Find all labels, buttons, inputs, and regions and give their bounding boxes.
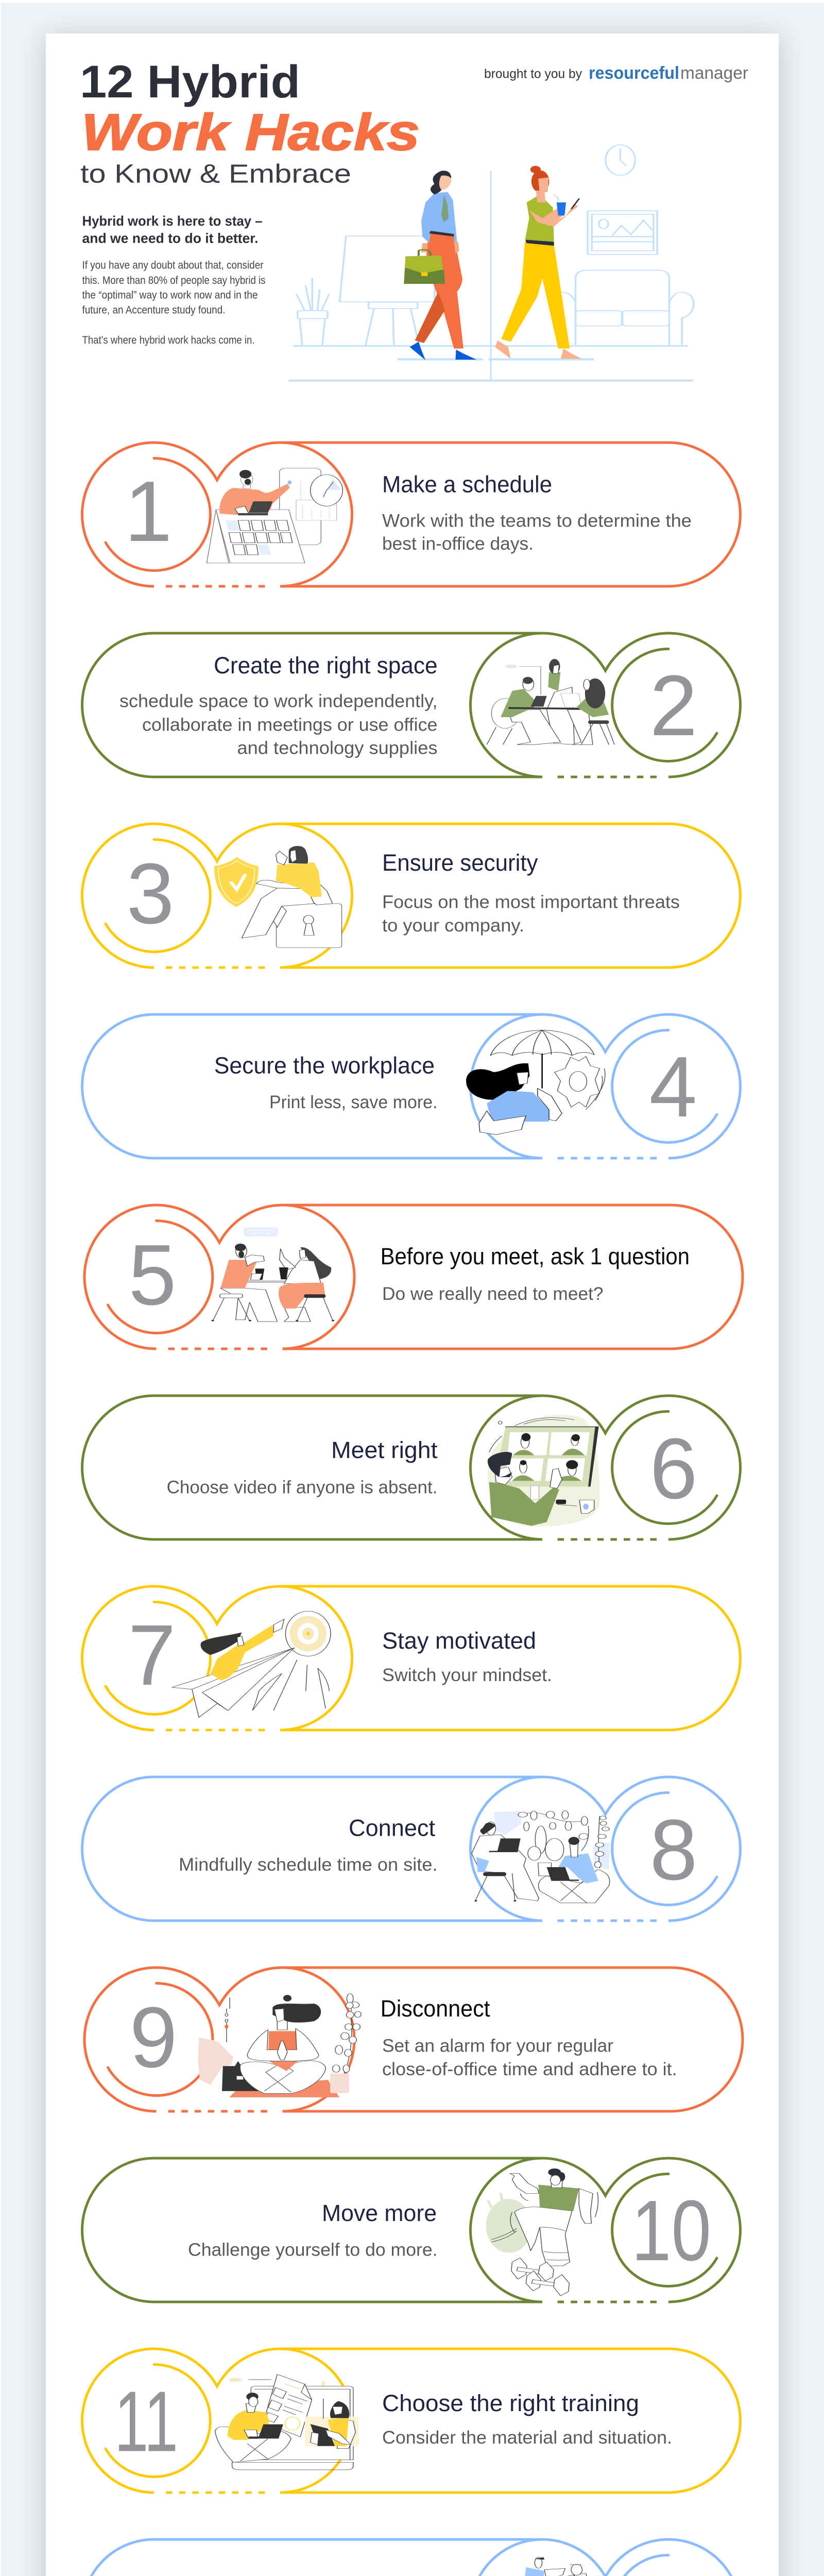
pill outline (82, 1777, 741, 1921)
number: 2 (650, 658, 697, 754)
heading: Stay motivated (382, 1628, 536, 1654)
number: 1 (125, 464, 172, 560)
header: brand line: manager (680, 63, 748, 83)
step 1 (82, 443, 741, 586)
body text: Focus on the most important threats (382, 892, 680, 912)
body text: Print less, save more. (269, 1092, 438, 1112)
body text: Switch your mindset. (382, 1665, 552, 1685)
body text: Challenge yourself to do more. (188, 2240, 438, 2260)
icon: shield and padlock (214, 846, 342, 948)
body text: Consider the material and situation. (382, 2428, 672, 2448)
icon: two people on laptops with plants (472, 1811, 610, 1903)
heading: Disconnect (381, 1995, 490, 2022)
heading: Secure the workplace (214, 1052, 435, 1079)
step 5 (84, 1205, 743, 1349)
pill outline (82, 824, 741, 968)
header: intro text: Hybrid work is here to stay – (82, 213, 263, 229)
pill outline (82, 633, 741, 777)
heading: Choose the right training (382, 2390, 639, 2416)
number: 11 (114, 2374, 178, 2470)
heading: Move more (322, 2200, 437, 2226)
header: intro text: and we need to do it better. (82, 230, 259, 246)
header: title: 12 Hybrid (80, 56, 300, 107)
step 4 (82, 1014, 741, 1158)
step 8 (82, 1777, 741, 1921)
icon: man at calendar (207, 468, 342, 563)
pill outline (82, 1014, 741, 1158)
number: 7 (128, 1607, 176, 1703)
number: 4 (649, 1039, 697, 1135)
pill outline (82, 1396, 741, 1539)
heading: Ensure security (382, 850, 538, 876)
pill outline (82, 2158, 741, 2302)
woman with coffee and phone (495, 166, 582, 359)
header: intro text: That’s where hybrid work hacks come in. (82, 334, 254, 346)
icon: woman with umbrella and gear (466, 1030, 605, 1134)
icon: paper plane and target (172, 1611, 331, 1717)
woman with briefcase (404, 171, 476, 360)
body text: to your company. (382, 916, 524, 936)
pill outline (84, 1968, 743, 2111)
heading: Create the right space (214, 652, 438, 679)
header: intro text (82, 213, 266, 346)
number: 3 (127, 846, 174, 942)
body text: best in-office days. (382, 534, 534, 554)
body text: Mindfully schedule time on site. (179, 1855, 438, 1875)
hero illustration: office room and two walking women (288, 145, 694, 381)
pill outline (82, 443, 741, 586)
header: intro text: If you have any doubt about that, consider (82, 259, 264, 271)
pill outline (84, 1205, 743, 1349)
heading: Meet right (331, 1437, 438, 1463)
header: brand line: resourceful (589, 63, 679, 83)
body text: Work with the teams to determine the (382, 511, 692, 531)
body text (119, 691, 438, 758)
number: 6 (650, 1421, 697, 1517)
header: intro text: future, an Accenture study found. (82, 304, 226, 316)
room line art (288, 145, 694, 381)
heading: Connect (349, 1815, 435, 1841)
icon: two people talking over coffee (211, 1227, 334, 1321)
icon: video call on screen (488, 1415, 599, 1527)
step 10 (82, 2158, 741, 2302)
header: title (80, 56, 420, 189)
header: intro text: this. More than 80% of people say hybrid is (82, 275, 266, 286)
pill outline (82, 2349, 741, 2493)
header: title: to Know & Embrace (80, 159, 351, 189)
number: 5 (129, 1227, 176, 1323)
icon: man exercising with ball and dumbbells (486, 2168, 598, 2296)
body text: close-of-office time and adhere to it. (382, 2059, 677, 2079)
icon: online training on laptop (215, 2375, 359, 2470)
step 9 (84, 1968, 743, 2111)
heading: Before you meet, ask 1 question (381, 1243, 690, 1269)
body text (382, 892, 680, 936)
icon: people gardening together (441, 2557, 604, 2576)
step 3 (82, 824, 741, 968)
step 11 (82, 2349, 741, 2493)
step 2 (82, 633, 741, 777)
pill outline (82, 2539, 741, 2576)
body text: Do we really need to meet? (382, 1284, 604, 1304)
body text (382, 2036, 677, 2079)
step 7 (82, 1586, 741, 1730)
body text: collaborate in meetings or use office (142, 715, 438, 735)
heading: Make a schedule (382, 471, 552, 498)
icon: team around table (487, 659, 614, 744)
icon: meditating woman (198, 1994, 361, 2097)
body text: Choose video if anyone is absent. (167, 1478, 438, 1498)
number: 8 (650, 1802, 697, 1898)
number: 9 (130, 1990, 177, 2086)
header: brand line: brought to you by (484, 67, 582, 81)
body text (382, 511, 692, 554)
body text: schedule space to work independently, (119, 691, 438, 711)
body text: Set an alarm for your regular (382, 2036, 613, 2056)
header: brand line (484, 63, 748, 83)
header: title: Work Hacks (81, 104, 420, 161)
step 6 (82, 1396, 741, 1539)
header: intro text: the “optimal” way to work now and in the (82, 290, 258, 301)
pill outline (82, 1586, 741, 1730)
body text: and technology supplies (237, 738, 438, 758)
step 12 (82, 2539, 741, 2576)
number: 10 (631, 2183, 711, 2279)
